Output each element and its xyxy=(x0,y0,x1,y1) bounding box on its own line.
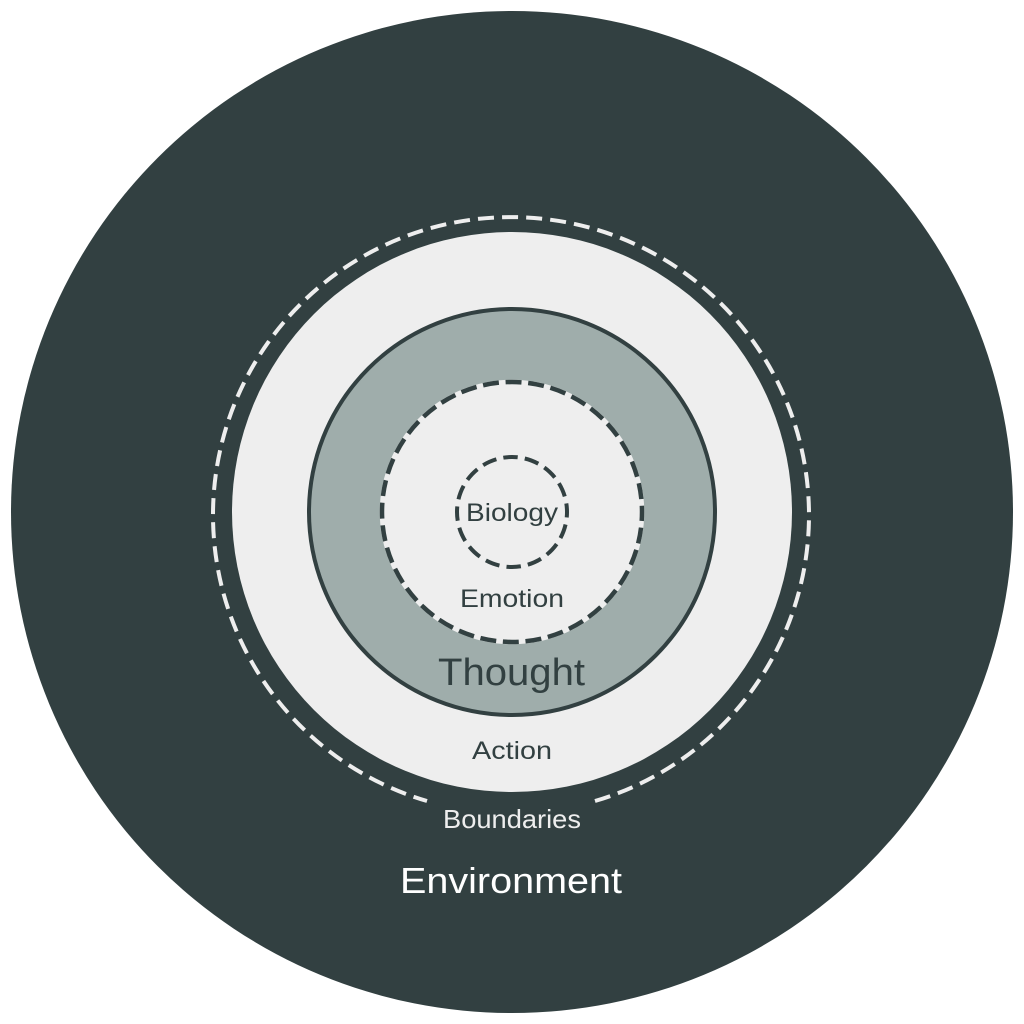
label: Environment: Environment xyxy=(400,860,622,901)
label: Boundaries: Boundaries xyxy=(443,804,581,834)
emotion circle xyxy=(382,382,642,642)
label: Biology: Biology xyxy=(466,499,559,527)
boundaries dashed ring xyxy=(213,217,809,801)
label: Thought: Thought xyxy=(438,652,585,694)
action circle xyxy=(232,232,792,792)
label: Emotion: Emotion xyxy=(460,585,564,613)
biology dashed circle xyxy=(457,457,567,567)
thought circle xyxy=(309,309,715,715)
label: Action: Action xyxy=(472,737,552,765)
